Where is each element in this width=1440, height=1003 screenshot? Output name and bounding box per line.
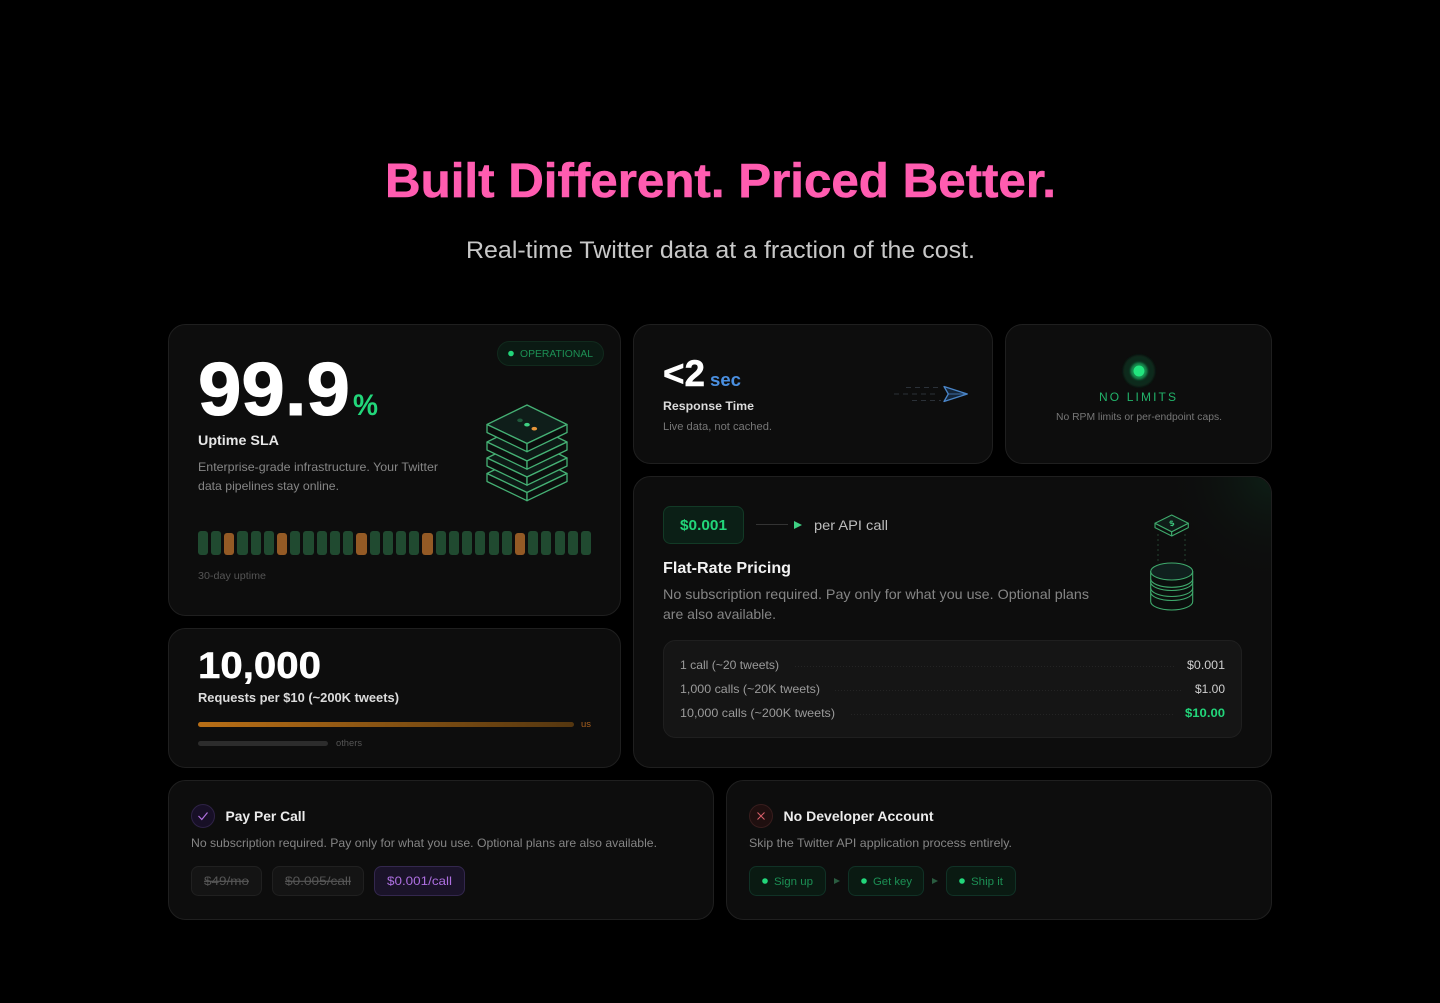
- big number: under 2 sec: [663, 353, 741, 394]
- bar: us: [198, 719, 592, 729]
- icon: cross: [750, 804, 772, 828]
- status pill: operational: [498, 342, 604, 366]
- step: ship it: [946, 866, 1016, 896]
- row: 1 call: 1 call (~20 tweets): [680, 658, 779, 672]
- bar: us: us: [581, 719, 592, 729]
- description: data pipelines stay online.: [198, 479, 339, 493]
- row: 1 call: $0.001: [1187, 658, 1225, 672]
- chip: $0.005/call: $0.005/call: [285, 874, 351, 888]
- heading: flat-rate pricing: Flat-Rate Pricing: [663, 560, 791, 577]
- chip: $0.005/call: [272, 866, 364, 896]
- row: 10,000 calls: [680, 706, 1225, 720]
- step: get key: [848, 866, 924, 896]
- chip: $49/mo: $49/mo: [204, 874, 249, 888]
- heading: response time: Response Time: [663, 399, 754, 413]
- title: Built Different. Priced Better.: [385, 155, 1056, 208]
- panel: uptime SLA: [168, 324, 620, 616]
- icon: paper plane with speed lines: [894, 386, 967, 402]
- bar: others: others: [336, 738, 363, 748]
- status pill: operational: OPERATIONAL: [520, 348, 593, 360]
- big number: under 2 sec: sec: [710, 370, 741, 390]
- label: per API call: per API call: [814, 517, 888, 533]
- description: Enterprise-grade infrastructure. Your Twitter: [198, 460, 438, 474]
- big number: 99.9%: %: [353, 389, 378, 422]
- step: sign up: Sign up: [774, 876, 813, 888]
- heading: pay per call: Pay Per Call: [226, 808, 306, 824]
- chip: $0.001/call: [374, 866, 464, 896]
- row: 1 call: [680, 658, 1225, 672]
- price badge: $0.001: [680, 517, 727, 534]
- bar: others: [198, 738, 363, 748]
- icon: check: [192, 804, 214, 828]
- step: sign up: [750, 866, 826, 896]
- price badge: [664, 506, 744, 544]
- icon: coin over database: [1151, 515, 1193, 610]
- pricing table: [664, 640, 1242, 738]
- chart: 30-day uptime bars: [198, 531, 591, 555]
- description: No RPM limits or per-endpoint caps.: [1056, 412, 1222, 423]
- icon: coin over database: $: [1168, 518, 1176, 528]
- row: 1,000 calls: [680, 682, 1225, 696]
- icon: isometric server stack: [487, 405, 567, 501]
- row: 1,000 calls: 1,000 calls (~20K tweets): [680, 682, 820, 696]
- big number: under 2 sec: <2: [663, 353, 705, 394]
- step: get key: Get key: [873, 876, 913, 888]
- panel: flat-rate pricing: [634, 476, 1272, 768]
- heading: no limits: NO LIMITS: [1099, 390, 1176, 404]
- description: No subscription required. Pay only for what you use. Optional plans: [663, 586, 1089, 602]
- chip: $0.001/call: $0.001/call: [387, 874, 452, 888]
- chip: $49/mo: [192, 866, 262, 896]
- panel: no developer account: [726, 780, 1272, 920]
- heading: requests per $10: Requests per $10 (~200K tweets): [198, 691, 399, 705]
- big number: 10,000: 10,000: [198, 645, 321, 686]
- step: ship it: Ship it: [971, 876, 1003, 888]
- panel: pay per call: [168, 780, 714, 920]
- row: 1,000 calls: $1.00: [1195, 682, 1225, 696]
- description: Skip the Twitter API application process entirely.: [749, 836, 1012, 850]
- subtitle: Real-time Twitter data at a fraction of the cost.: [466, 237, 975, 264]
- description: Live data, not cached.: [663, 421, 772, 433]
- arrow: [932, 878, 938, 884]
- heading: no developer account: No Developer Account: [784, 808, 934, 824]
- description: No subscription required. Pay only for what you use. Optional plans are also available.: [191, 836, 657, 850]
- heading: uptime SLA: Uptime SLA: [198, 432, 279, 448]
- description: are also available.: [663, 606, 776, 622]
- icon: glowing green dot: [1123, 355, 1155, 387]
- row: 10,000 calls: $10.00: [1185, 706, 1225, 720]
- row: 10,000 calls: 10,000 calls (~200K tweets): [680, 706, 835, 720]
- caption: 30-day uptime: 30-day uptime: [198, 571, 266, 582]
- panel: requests per $10: [168, 628, 620, 768]
- big number: 99.9%: 99.9: [198, 347, 350, 431]
- description: [663, 586, 1089, 622]
- panel: no limits: [1006, 324, 1272, 464]
- description: [198, 460, 438, 493]
- arrow: [756, 521, 802, 529]
- panel: response time: [634, 324, 992, 464]
- arrow: [834, 878, 840, 884]
